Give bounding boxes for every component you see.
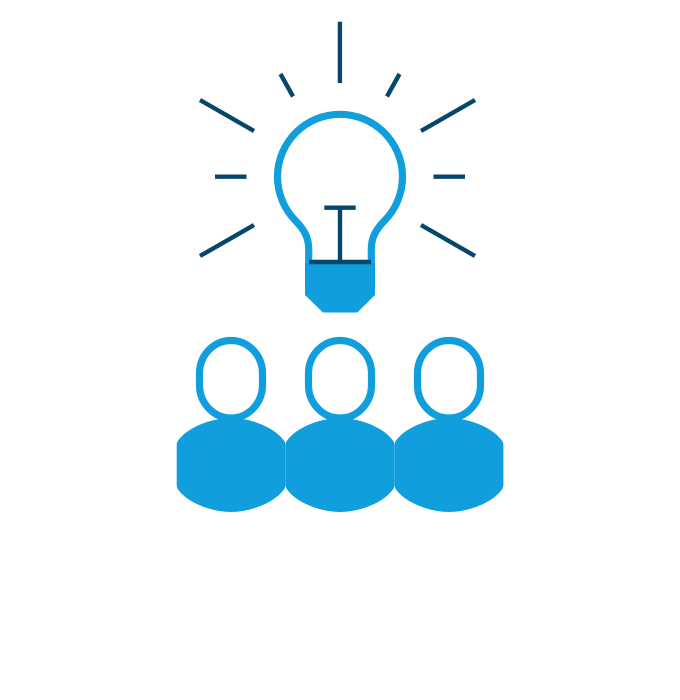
icon: person right — [395, 340, 503, 512]
icon: person left — [177, 340, 285, 512]
bulb base — [305, 262, 375, 312]
filament — [309, 208, 371, 262]
icon: light rays — [200, 22, 475, 256]
icon: person center — [286, 340, 394, 512]
icon: lightbulb — [278, 114, 403, 312]
bulb glass outline — [278, 114, 403, 264]
